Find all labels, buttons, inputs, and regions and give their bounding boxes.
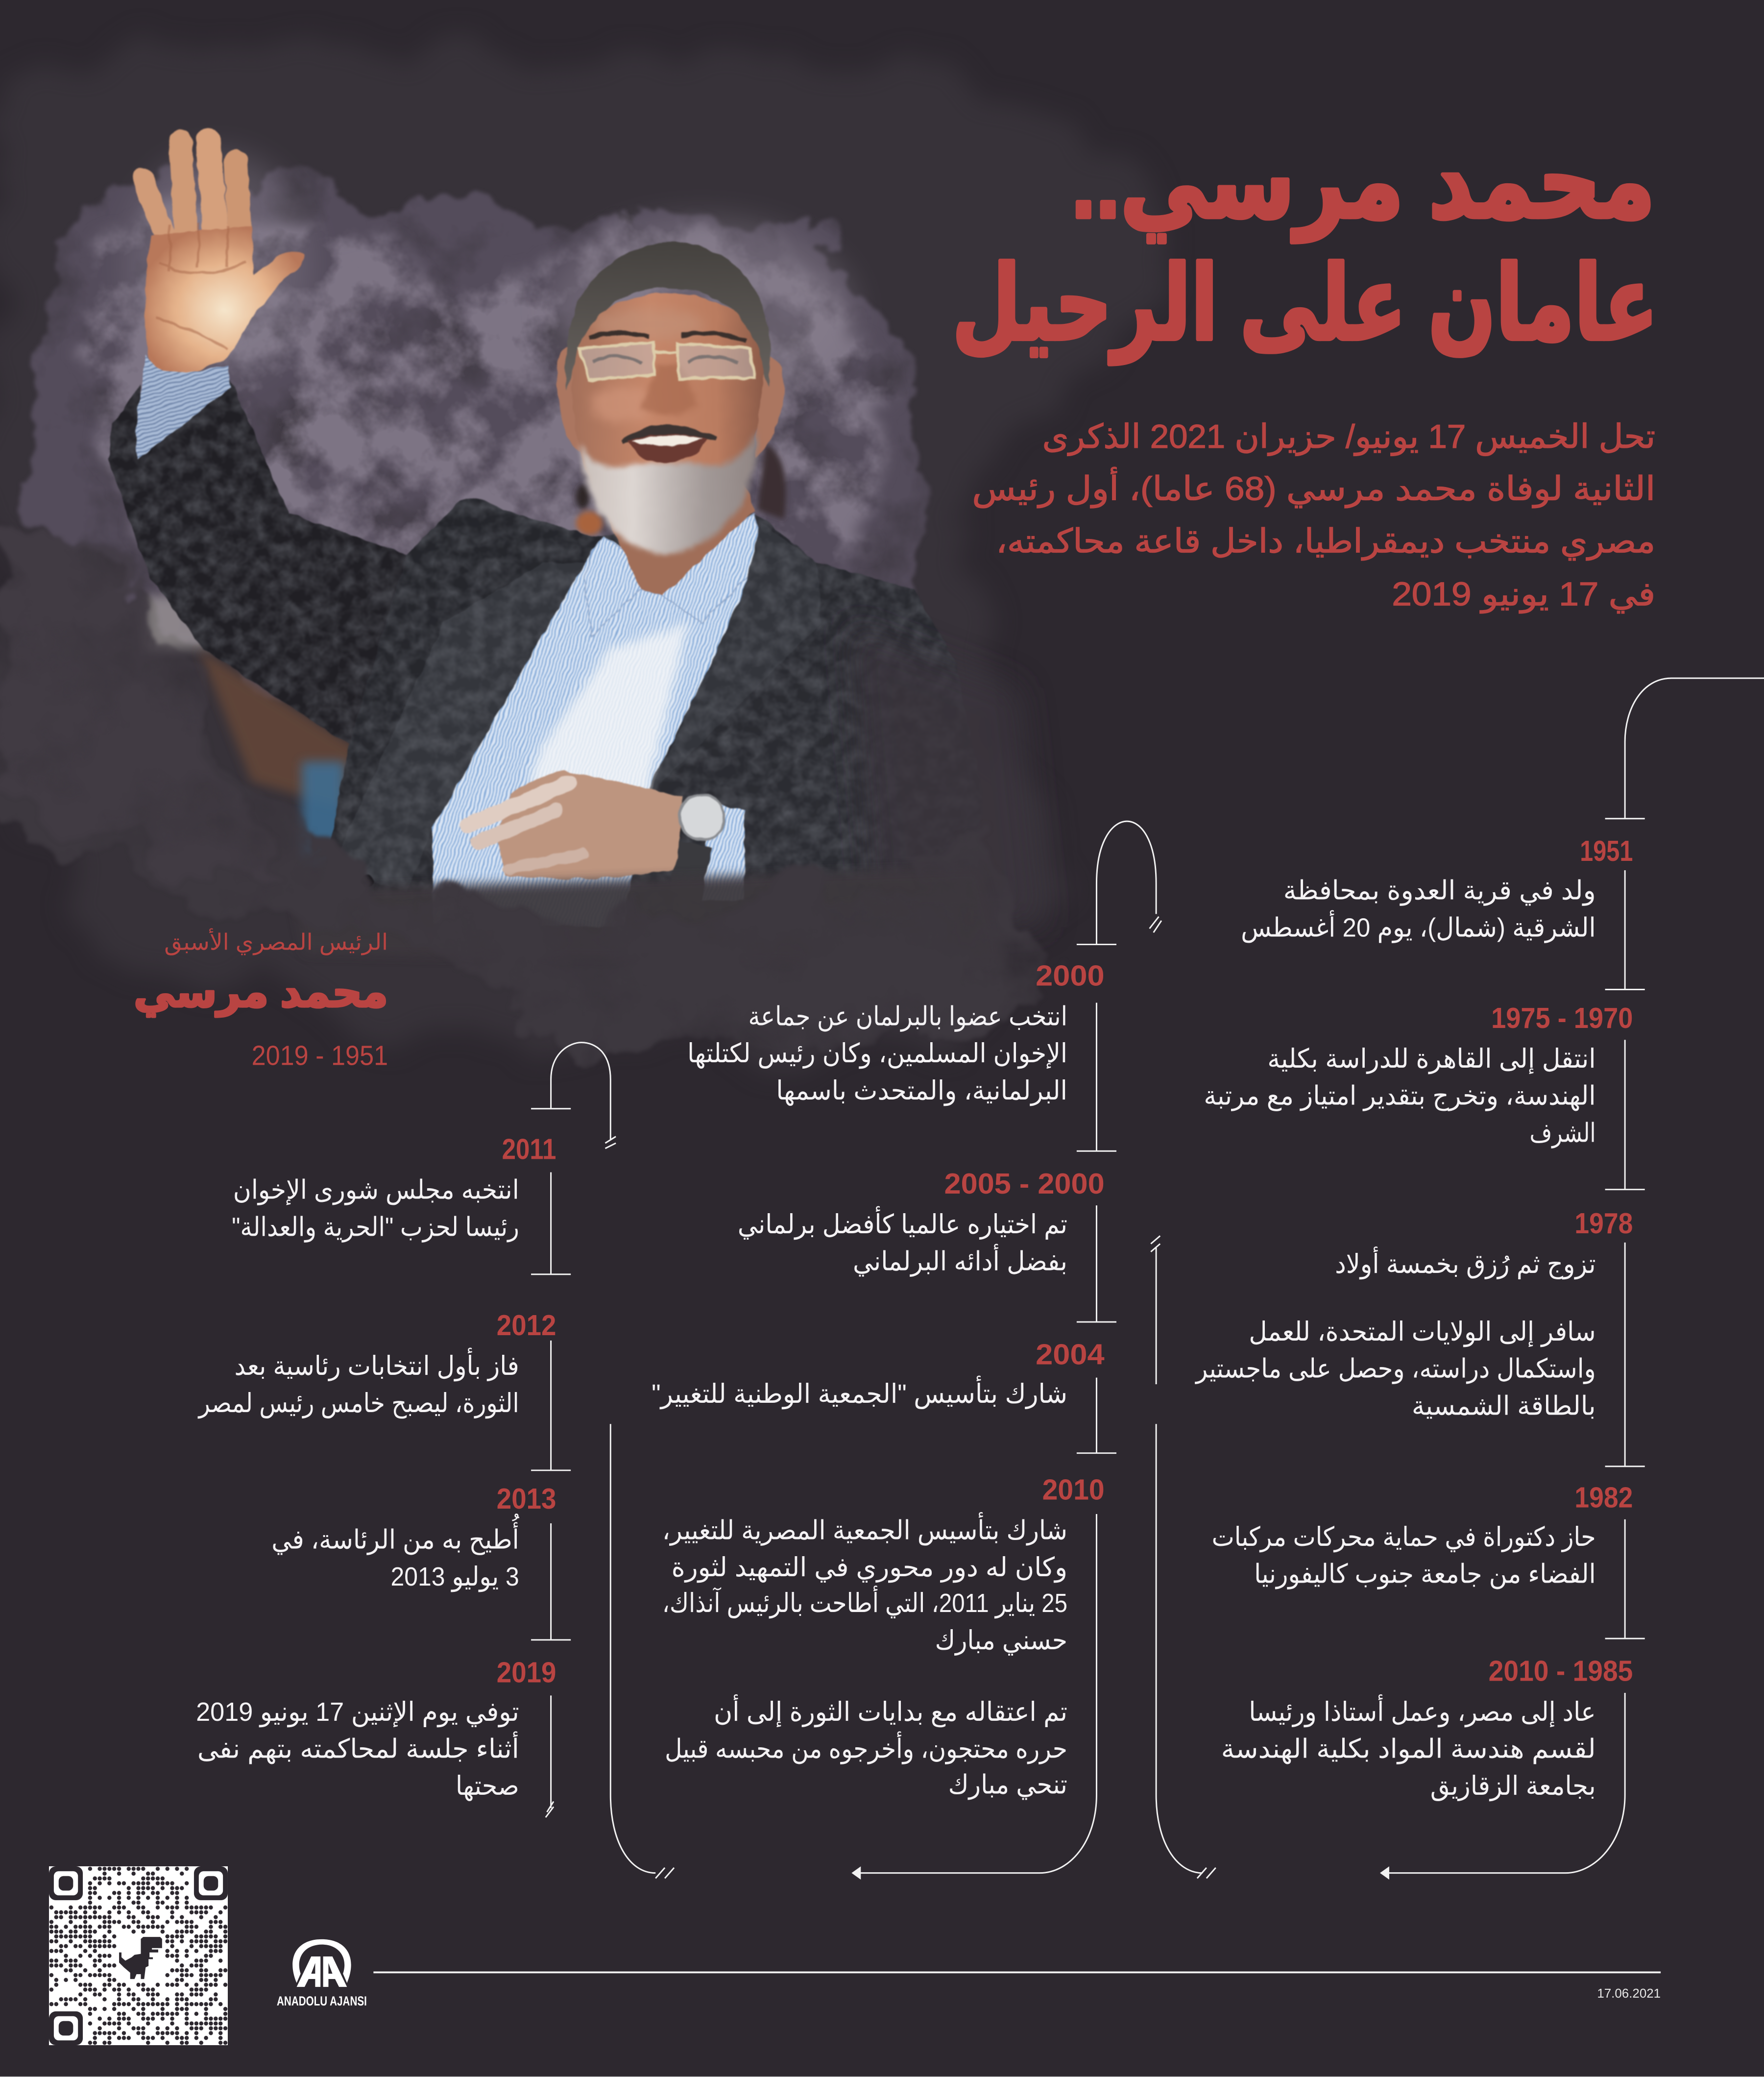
- intro paragraph: مصري منتخب ديمقراطيا، داخل قاعة محاكمته،: [996, 523, 1655, 561]
- text: studies: الهندسة، وتخرج بتقدير امتياز مع مرتبة: [1204, 1081, 1596, 1112]
- text: marriage and travel: [1194, 1246, 1596, 1420]
- title: محمد مرسي..: [1071, 123, 1655, 243]
- right lapel: [649, 523, 821, 795]
- text: return to Egypt: لقسم هندسة المواد بكلية الهندسة: [1221, 1734, 1596, 1764]
- intro paragraph: في 17 يونيو 2019: [1392, 576, 1655, 613]
- text: death: أثناء جلسة لمحاكمته بتهم نفى: [197, 1731, 519, 1764]
- intro paragraph: [972, 418, 1655, 613]
- mouth: [628, 434, 707, 463]
- text: return to Egypt: عاد إلى مصر، وعمل أستاذا ورئيسا: [1249, 1694, 1596, 1727]
- intro paragraph: الثانية لوفاة محمد مرسي (68 عاما)، أول رئيس: [972, 467, 1655, 509]
- text: marriage and travel: بالطاقة الشمسية: [1412, 1391, 1596, 1420]
- nose: [641, 364, 698, 415]
- year 1985-2010: 2010 - 1985: [1489, 1655, 1633, 1687]
- text: elected to parliament: [687, 1002, 1067, 1106]
- text: elected to parliament: البرلمانية، والمتحدث باسمها: [776, 1076, 1067, 1106]
- background person: [576, 444, 786, 535]
- text: presidential election: [197, 1347, 519, 1419]
- shirt: [433, 513, 763, 927]
- text: presidential election: فاز بأول انتخابات رئاسية بعد: [235, 1347, 519, 1381]
- text: revolution: حرره محتجون، وأخرجوه من محبسه قبيل: [665, 1731, 1067, 1764]
- watch: [669, 841, 712, 904]
- mustache: [623, 427, 715, 442]
- raised hand fingers: [143, 141, 241, 252]
- text: revolution: تم اعتقاله مع بدايات الثورة إلى أن: [714, 1694, 1067, 1728]
- raised hand palm: [145, 225, 305, 379]
- year 2011: 2011: [502, 1133, 556, 1166]
- text: birth: [1241, 876, 1596, 943]
- portrait caption: الرئيس المصري الأسبق: [164, 928, 388, 955]
- footer rule: [373, 1972, 1661, 1973]
- beard: [580, 431, 757, 554]
- text: doctorate: [1212, 1522, 1596, 1589]
- wrist cuff: [702, 802, 744, 901]
- foreground smoke over lower portrait: [0, 524, 1046, 1053]
- text: return to Egypt: [1221, 1694, 1596, 1802]
- text: return to Egypt: بجامعة الزقازيق: [1430, 1771, 1596, 1802]
- text: revolution: [662, 1512, 1067, 1800]
- portrait photo of Mohamed Morsi: [109, 141, 983, 927]
- Anadolu Agency logo: [277, 1939, 367, 2008]
- portrait caption: 2019 - 1951: [252, 1041, 388, 1072]
- timeline arrowheads: [851, 1866, 1389, 1880]
- text: studies: [1204, 1044, 1596, 1148]
- text: revolution: حسني مبارك: [935, 1626, 1067, 1656]
- text: doctorate: الفضاء من جامعة جنوب كاليفورنيا: [1254, 1560, 1596, 1589]
- year 2004: 2004: [1036, 1338, 1105, 1371]
- text: overthrown: 3 يوليو 2013: [391, 1562, 519, 1592]
- text: revolution: 25 يناير 2011، التي أطاحت بالرئيس آنذاك،: [662, 1586, 1067, 1618]
- neck: [606, 477, 755, 596]
- text: party head: [232, 1175, 519, 1242]
- text: marriage and travel: سافر إلى الولايات المتحدة، للعمل: [1249, 1317, 1596, 1347]
- year 1978: 1978: [1574, 1207, 1633, 1240]
- year 2010: 2010: [1042, 1473, 1105, 1506]
- intro paragraph: تحل الخميس 17 يونيو/ حزيران 2021 الذكرى: [1042, 418, 1655, 456]
- hair: [565, 243, 771, 391]
- jacket body: [315, 498, 983, 921]
- text: death: توفي يوم الإثنين 17 يونيو 2019: [196, 1697, 519, 1727]
- text: party head: انتخبه مجلس شورى الإخوان: [233, 1175, 519, 1205]
- icon: dinosaur: [119, 1937, 162, 1979]
- text: revolution: تنحي مبارك: [948, 1770, 1067, 1800]
- eye shadows: [593, 356, 739, 363]
- text: birth: ولد في قرية العدوة بمحافظة: [1283, 876, 1596, 906]
- text: overthrown: [271, 1514, 520, 1592]
- raised arm jacket: [109, 377, 407, 744]
- year 2019: 2019: [497, 1656, 556, 1688]
- date: 17.06.2021: [1597, 1987, 1661, 2001]
- forehead highlight: [593, 309, 704, 341]
- cuff raised arm: [135, 355, 230, 460]
- text: marriage and travel: واستكمال دراسته، وحصل على ماجستير: [1194, 1354, 1596, 1384]
- text: death: صحتها: [456, 1771, 519, 1801]
- text: studies: الشرف: [1529, 1118, 1596, 1148]
- text: studies: انتقل إلى القاهرة للدراسة بكلية: [1267, 1044, 1596, 1074]
- lower hand: [497, 771, 682, 879]
- portrait caption: [134, 928, 388, 1072]
- smoke background behind portrait: [0, 42, 1147, 1050]
- text: best parliamentarian: بفضل أدائه البرلماني: [853, 1244, 1067, 1277]
- text: party head: رئيسا لحزب "الحرية والعدالة": [232, 1212, 519, 1242]
- text: elected to parliament: الإخوان المسلمين، وكان رئيس لكتلتها: [687, 1039, 1067, 1069]
- year 2013: 2013: [497, 1482, 556, 1515]
- jacket button: [360, 874, 373, 887]
- text: revolution: وكان له دور محوري في التمهيد لثورة: [672, 1553, 1067, 1583]
- text: national association: شارك بتأسيس "الجمعية الوطنية للتغيير": [652, 1375, 1067, 1409]
- year 2000-2005: 2005 - 2000: [944, 1167, 1105, 1200]
- left lapel: [331, 563, 584, 893]
- portrait caption: محمد مرسي: [134, 969, 388, 1017]
- year 1951: 1951: [1580, 834, 1633, 867]
- year 2000: 2000: [1036, 959, 1105, 992]
- title: [952, 123, 1658, 365]
- lower hand fingers: [467, 783, 583, 869]
- Anadolu Agency logo: ANADOLU AJANSI: [277, 1994, 367, 2008]
- text: overthrown: أُطيح به من الرئاسة، في: [271, 1514, 520, 1555]
- face: [572, 293, 766, 548]
- QR code: [49, 1866, 228, 2045]
- text: birth: الشرقية (شمال)، يوم 20 أغسطس: [1241, 910, 1596, 943]
- timeline connector lines: [531, 678, 1764, 1878]
- text: best parliamentarian: [738, 1206, 1067, 1277]
- text: elected to parliament: انتخب عضوا بالبرلمان عن جماعة: [748, 1002, 1067, 1031]
- glasses: [580, 343, 755, 380]
- text: death: [196, 1697, 519, 1801]
- timeline column: parliament years: [652, 959, 1105, 1800]
- year 1970-1975: 1975 - 1970: [1491, 1002, 1633, 1034]
- year 2012: 2012: [497, 1309, 556, 1342]
- timeline column: early life: [1194, 834, 1633, 1802]
- timeline column: presidency years: [196, 1133, 556, 1801]
- text: presidential election: الثورة، ليصبح خامس رئيس لمصر: [197, 1389, 519, 1419]
- year 1982: 1982: [1574, 1481, 1633, 1514]
- cheek highlight: [591, 386, 654, 422]
- collar: [584, 513, 763, 636]
- text: marriage and travel: تزوج ثم رُزق بخمسة أولاد: [1335, 1246, 1596, 1279]
- text: best parliamentarian: تم اختياره عالميا كأفضل برلماني: [738, 1206, 1067, 1240]
- text: doctorate: حاز دكتوراة في حماية محركات مركبات: [1212, 1522, 1596, 1552]
- eyebrows: [589, 333, 746, 342]
- palm creases: [156, 222, 246, 350]
- text: revolution: شارك بتأسيس الجمعية المصرية للتغيير،: [662, 1512, 1067, 1545]
- ears: [557, 347, 784, 457]
